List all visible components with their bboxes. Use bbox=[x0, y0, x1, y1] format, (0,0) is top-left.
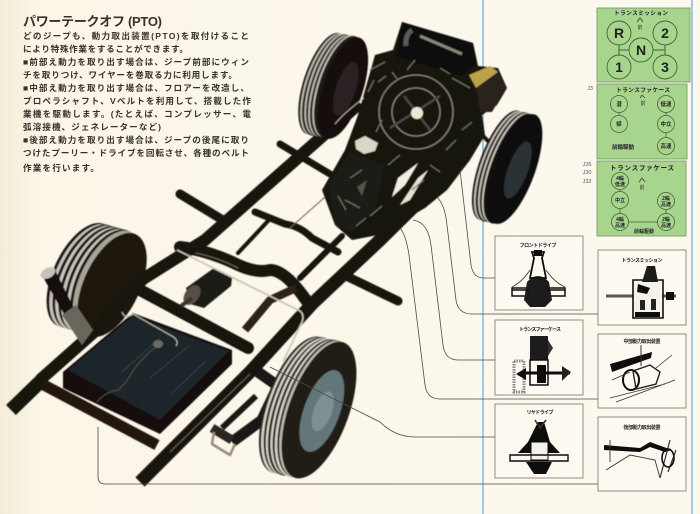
frame rails bbox=[11, 103, 445, 482]
panel: transfer case J26 J30 J32 bbox=[597, 161, 686, 236]
selector labels: 中立 bbox=[615, 197, 625, 204]
box title: トランスファーケース bbox=[519, 326, 561, 333]
paragraph: PTO intro and uses: 作業を行います。 bbox=[23, 162, 99, 173]
rear PTO drawing bbox=[604, 440, 676, 478]
selector labels: 高速 bbox=[661, 222, 671, 229]
forward marker: 前 bbox=[637, 24, 643, 31]
selector labels: 前輪駆動 bbox=[634, 228, 654, 235]
steering link bbox=[335, 98, 364, 124]
panel: transmission shift pattern bbox=[597, 8, 690, 82]
radiator bbox=[396, 22, 477, 76]
fuel tank bbox=[63, 312, 232, 434]
engine block right side bbox=[476, 72, 506, 112]
paragraph: PTO intro and uses: プロペラシャフト、Vベルトを利用して、搭載した作 bbox=[23, 95, 251, 106]
wheel: front left bbox=[288, 25, 378, 146]
selector positions bbox=[610, 96, 674, 154]
panel title: トランスミッション bbox=[614, 10, 668, 17]
box title: フロントドライブ bbox=[520, 242, 556, 249]
battery bbox=[469, 66, 498, 88]
box title: 中部動力取出装置 bbox=[624, 338, 660, 345]
forward marker: 前 bbox=[640, 100, 646, 107]
selector labels bbox=[612, 100, 672, 151]
rear differential drawing bbox=[510, 420, 568, 474]
panel title: トランスファケース bbox=[616, 86, 670, 94]
selector links bbox=[619, 112, 666, 137]
front axle link bbox=[482, 135, 497, 150]
fan guard rings bbox=[379, 75, 453, 149]
selector labels: 前輪駆動 bbox=[612, 143, 634, 151]
panel title: トランスファケース bbox=[610, 164, 674, 172]
filler neck bbox=[39, 265, 93, 345]
selector labels: 低速 bbox=[615, 181, 625, 188]
selector labels bbox=[615, 175, 671, 235]
panel: transfer case J3 bbox=[597, 84, 687, 159]
paragraph: PTO intro and uses: 業機を駆動します。(たとえば、コンプレッサー、電 bbox=[23, 108, 251, 119]
model labels J26 J30 J32: J30 bbox=[583, 170, 591, 176]
fan hub bbox=[411, 107, 423, 119]
box title: トランスミッション bbox=[622, 258, 662, 264]
frame behind: outriggers and crossmembers bbox=[140, 144, 398, 348]
heading: パワーテークオフ (PTO) bbox=[23, 14, 162, 29]
model labels J26 J30 J32: J26 bbox=[583, 162, 591, 168]
engine highlights bbox=[338, 60, 472, 226]
model label J3: J3 bbox=[587, 86, 593, 92]
selector labels: 中立 bbox=[660, 120, 672, 128]
gear labels: 3 bbox=[661, 59, 669, 75]
gear labels bbox=[614, 25, 669, 75]
gear labels: 1 bbox=[615, 59, 623, 75]
gear labels: R bbox=[614, 25, 624, 41]
shift connections bbox=[619, 45, 665, 55]
chassis gaps bbox=[392, 163, 418, 197]
paragraph: PTO intro and uses: ■中部え動力を取り出す場合は、フロアーを改造し、 bbox=[23, 82, 249, 93]
box title: リヤドライブ bbox=[526, 409, 554, 416]
selector labels: 低速 bbox=[660, 100, 672, 108]
selector labels: 高速 bbox=[661, 201, 671, 208]
engine and drivetrain bbox=[322, 22, 507, 240]
muffler bbox=[180, 268, 232, 308]
diagram box: rear PTO bbox=[598, 417, 686, 491]
selector labels: 帰 bbox=[616, 120, 622, 128]
diagram box: mid PTO bbox=[598, 334, 686, 408]
selector labels: 2輪 bbox=[662, 195, 670, 202]
wheel: rear left bbox=[32, 209, 161, 351]
leader lines bbox=[98, 170, 598, 484]
paragraph: PTO intro and uses: ■後部え動力を取り出す場合は、ジープの後尾に取り bbox=[23, 134, 249, 145]
wheel: front right bbox=[461, 102, 554, 232]
selector links bbox=[620, 190, 666, 222]
front differential drawing bbox=[512, 250, 565, 307]
paragraph: PTO intro and uses: つけたプーリー・ドライブを回転させ、各種のベルト bbox=[23, 147, 249, 158]
gearbox bbox=[328, 152, 385, 232]
model labels J26 J30 J32: J32 bbox=[583, 179, 591, 185]
diagram box: transfer case bbox=[495, 320, 583, 395]
box title: 後部動力取出装置 bbox=[624, 424, 660, 431]
diagram box: front drive bbox=[495, 236, 583, 310]
diagram box: rear drive bbox=[495, 404, 583, 478]
paragraph: PTO intro and uses bbox=[23, 30, 251, 173]
selector labels: 4輪 bbox=[616, 175, 624, 182]
rear axle arm and spring shackle bbox=[212, 288, 296, 455]
oil cap bbox=[355, 136, 378, 154]
blue page rules bbox=[483, 0, 692, 514]
paragraph: PTO intro and uses: 弧溶接機、ジェネレーターなど) bbox=[23, 121, 161, 132]
model labels J26 J30 J32 bbox=[583, 162, 591, 185]
diagram box: transmission bbox=[598, 250, 686, 325]
gear labels: 2 bbox=[661, 25, 669, 41]
selector labels: 高速 bbox=[615, 222, 625, 229]
gear positions bbox=[607, 21, 677, 79]
selector labels: 高速 bbox=[660, 142, 672, 150]
mid PTO drawing bbox=[610, 345, 675, 402]
transfer case drawing bbox=[514, 336, 571, 392]
paragraph: PTO intro and uses: ■前部え動力を取り出す場合は、ジープ前部にウィン bbox=[23, 56, 249, 67]
paragraph: PTO intro and uses: チを取りつけ、ワイヤーを巻取る力に利用します。 bbox=[23, 69, 237, 80]
gear labels: N bbox=[636, 42, 646, 58]
wheel: rear right bbox=[244, 324, 372, 491]
selector positions bbox=[612, 172, 674, 230]
paragraph: PTO intro and uses: により特殊作業をすることができます。 bbox=[23, 43, 188, 54]
selector labels: 4輪 bbox=[616, 216, 624, 223]
paragraph: PTO intro and uses: どのジープも、動力取出装置(PTO)を取付けること bbox=[23, 30, 249, 41]
selector labels: 潜 bbox=[616, 100, 622, 108]
chassis photo bbox=[11, 22, 554, 491]
selector labels: 2輪 bbox=[662, 216, 670, 223]
gearbox drawing bbox=[606, 266, 676, 318]
article text bbox=[23, 14, 251, 173]
forward marker: 前 bbox=[639, 184, 645, 191]
